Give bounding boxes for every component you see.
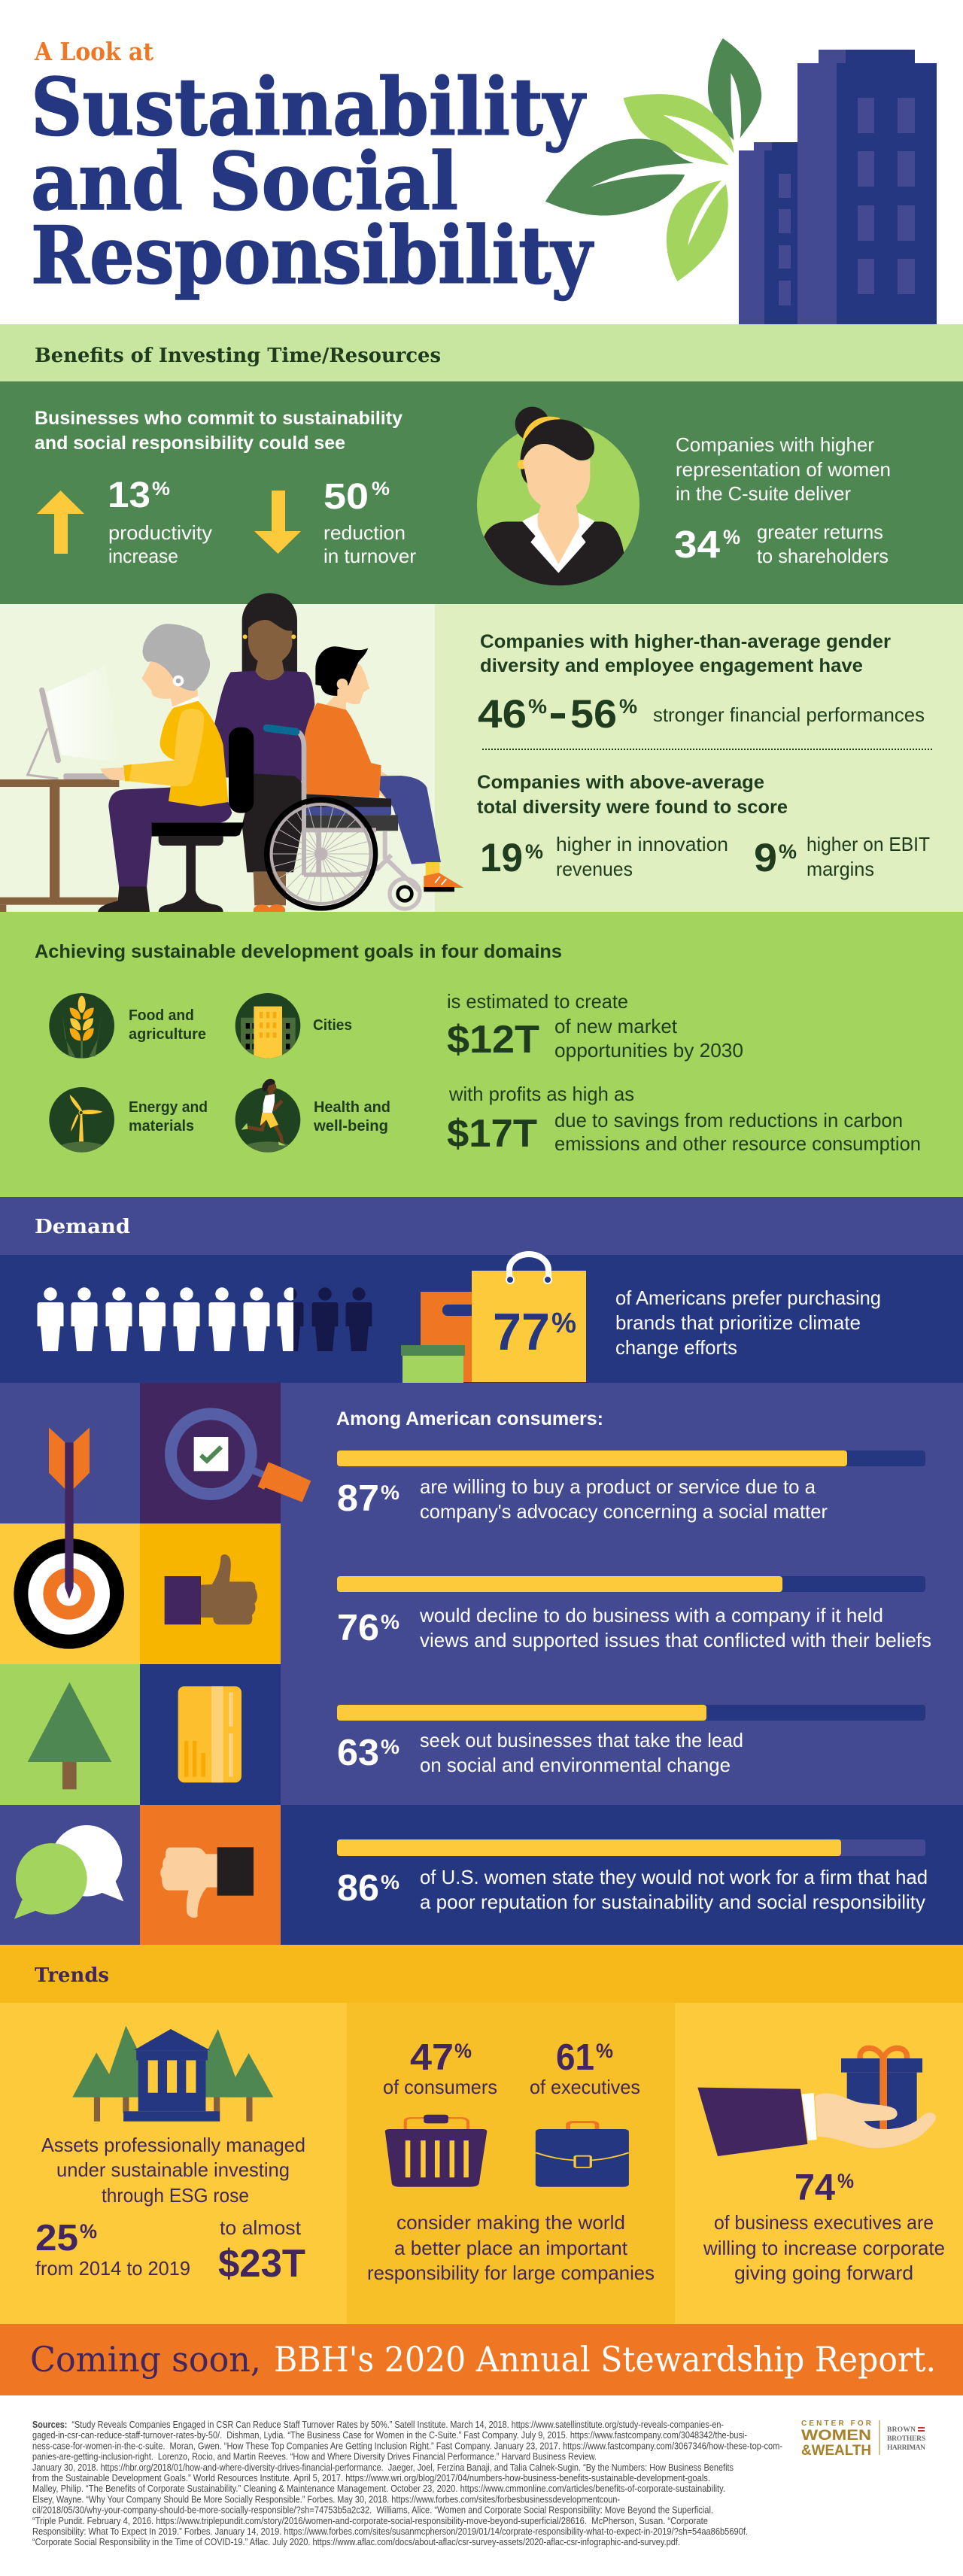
text block: businesses commit (35, 408, 403, 454)
text block: gender diversity: Companies with higher-than-average gender (480, 631, 891, 652)
heading: four domains: Achieving sustainable development goals in four domains (35, 941, 562, 962)
panel: trends heading band (0, 1945, 963, 2003)
stat: 61% executives (530, 2037, 640, 2098)
icon: shopping bags (401, 1254, 586, 1383)
icon: briefcase (536, 2122, 629, 2187)
labels: domains: agriculture (129, 1026, 206, 1043)
panel: header (0, 0, 963, 324)
stat: 46%-56%: 46 (478, 692, 527, 737)
stat: 63%: on social and environmental change (420, 1754, 731, 1776)
panel: 77% band (0, 1254, 963, 1383)
stat: 46%-56%: % (528, 695, 547, 718)
bar chart: 86% (337, 1839, 925, 1856)
title: Sustainability (31, 60, 587, 153)
stat: 77%: % (551, 1308, 576, 1339)
icon: hand holding gift (697, 2048, 936, 2156)
stat: 47% consumers: % (454, 2040, 472, 2062)
sources: “Corporate Social Responsibility in the Time of COVID-19.” Aflac. July 2020. https://www.aflac.com/docs/about-aflac/csr-survey-assets/2020-aflac-csr-infographic-and-survey.pdf. (32, 2536, 680, 2547)
stat: 86% (337, 1866, 928, 1913)
icon: down arrow (254, 491, 301, 554)
stat: 25% (35, 2218, 190, 2280)
panel: trends right (675, 2003, 963, 2324)
stat: 86%: of U.S. women state they would not work for a firm that had (420, 1866, 928, 1888)
stat: 19% innovation (480, 833, 728, 880)
text block: business executives: willing to increase corporate (703, 2237, 945, 2259)
stat: 87%: 87 (337, 1478, 379, 1519)
stat: $12T: $12T (447, 1018, 539, 1062)
text block: Americans prefer: change efforts (615, 1336, 737, 1359)
panel: sustainable development goals (0, 912, 963, 1197)
sources: ness-case-for-women-in-the-c-suite. Moran, Gwen. “How These Top Companies Are Getting Inclusion Right.” Fast Company. January 23, 2017. https://www.fastcompany.com/3067346/how-these-top-com- (32, 2441, 782, 2451)
logo: Brown Brothers Harriman: HARRIMAN (887, 2444, 925, 2452)
panel: benefits heading band (0, 324, 963, 381)
sources: panies-are-getting-inclusion-right. Lorenzo, Rocio, and Martin Reeves. “How and Where Diversity Drives Financial Performance.” Harvard Business Review. (32, 2451, 597, 2462)
stat: 50% reduction: in turnover (324, 545, 416, 567)
icon: wheat (49, 993, 114, 1059)
sources: January 30, 2018. https://hbr.org/2018/01/how-and-where-diversity-drives-financial-performance. Jaeger, Joel, Ferzina Banaji, and Talia Calnek-Sugin. “By the Numbers: How Business Benefits (32, 2462, 734, 2473)
text block: consider making the world: responsibility for large companies (367, 2262, 655, 2284)
stat: 86%: 86 (337, 1868, 379, 1909)
stat: 76%: views and supported issues that conflicted with their beliefs (420, 1629, 931, 1651)
stat: 34% returns: to shareholders (757, 545, 889, 567)
bar chart: 63% (337, 1705, 925, 1721)
icon: pine tree (28, 1682, 111, 1789)
text block: total diversity: Companies with above-average (477, 772, 764, 793)
stat: 61% executives: % (596, 2040, 613, 2062)
stat: 13% productivity: % (152, 478, 170, 500)
icon: computer desk (0, 666, 120, 912)
stat: 50% reduction (324, 477, 416, 567)
icon: thumbs up (165, 1554, 257, 1624)
panel: American consumers (281, 1383, 963, 1945)
stat: 47% consumers: of consumers (383, 2076, 497, 2098)
bar chart: 76% (337, 1576, 925, 1592)
panel: trends middle (347, 2003, 675, 2324)
stat: 50% reduction: 50 (324, 477, 369, 517)
figure: seated older woman (98, 624, 254, 912)
stat: 63% (337, 1729, 743, 1776)
stat: 86%: % (381, 1871, 399, 1894)
stat: 46%-56%: % (619, 695, 637, 718)
icon: city (235, 993, 300, 1060)
stat: $17T: with profits as high as (448, 1083, 634, 1105)
stat: 74%: % (837, 2170, 854, 2192)
sources: Responsibility: What To Expect In 2019.” Forbes. January 14, 2019. https://www.forbes.com/sites/susanmcpherson/2019/01/14/corprate-responsibility-what-to-expect-in-2019/?sh=54aa86b5690f. (32, 2526, 748, 2537)
panel: diversity (0, 593, 963, 912)
icon: credit card (178, 1686, 242, 1782)
stat: $23T: $23T (218, 2242, 305, 2286)
labels: domains: Cities (313, 1017, 352, 1034)
labels: domains (129, 1007, 390, 1135)
stat: 74% (794, 2167, 854, 2208)
stat: $12T: is estimated to create (447, 990, 628, 1013)
stat: 13% productivity (108, 475, 212, 567)
stat: 34% returns: greater returns (757, 521, 883, 543)
sources: Sources: “Study Reveals Companies Engaged in CSR Can Reduce Staff Turnover Rates by 50%.” Satell Institute. March 14, 2018. https://www.satellinstitute.org/study-reveals-companies-en- (32, 2419, 724, 2430)
labels: domains: Health and (314, 1099, 390, 1116)
text block: Americans prefer: brands that prioritize climate (615, 1311, 861, 1334)
stat: 50% reduction: % (372, 478, 390, 500)
stat: 34% returns: 34 (674, 523, 721, 566)
stat: 61% executives: of executives (530, 2076, 640, 2098)
stat: 9% EBIT: % (779, 840, 797, 863)
logo: Center for Women & Wealth: WOMEN (801, 2428, 871, 2444)
stat: 19% innovation: higher in innovation (556, 833, 728, 855)
labels: domains: Food and (129, 1007, 194, 1024)
text block: consider making the world: consider making the world (396, 2211, 625, 2234)
panel: icon grid (0, 1383, 311, 1945)
heading: benefits: Benefits of Investing Time/Resources (35, 345, 441, 367)
text block: business executives (703, 2211, 945, 2284)
panel: coming soon banner (0, 2324, 963, 2395)
icon: city buildings (739, 50, 937, 324)
logo: Brown Brothers Harriman: BROWN (887, 2426, 916, 2434)
stat: 13% productivity: productivity (108, 521, 212, 544)
stat: $17T: $17T (447, 1112, 537, 1156)
panel: green benefits (0, 381, 963, 604)
stat: 34% returns (674, 521, 889, 567)
stat: 9% EBIT: margins (807, 858, 874, 880)
stat: 25%: % (80, 2220, 97, 2243)
text block: consider making the world (367, 2211, 655, 2284)
icon: up arrow (37, 491, 84, 554)
icon: thumbs down (160, 1847, 254, 1918)
stat: 34% returns: % (723, 526, 740, 548)
stat: 76%: would decline to do business with a company if it held (419, 1604, 883, 1627)
stat: 76% (337, 1604, 931, 1651)
labels: domains: materials (129, 1118, 194, 1135)
heading: trends: Trends (35, 1964, 109, 1987)
title (31, 60, 594, 302)
icon: leaves (545, 38, 761, 281)
stat: 9% EBIT: higher on EBIT (807, 833, 930, 855)
sources: cil/2018/05/30/why-your-company-should-be-more-socially-responsible/?sh=74753b5a2c32. Williams, Alice. “Women and Corporate Social Responsibility: Move Beyond the Superficial. (32, 2505, 713, 2516)
text block: C-suite: in the C-suite deliver (676, 482, 851, 505)
icon: bank and trees (72, 2025, 273, 2122)
text block: C-suite: representation of women (676, 458, 891, 481)
logo: Center for Women & Wealth (801, 2420, 872, 2459)
eyebrow: A Look at: A Look at (34, 37, 154, 66)
stat: 46%-56%: stronger financial performances (653, 703, 925, 726)
sources: gaged-in-csr-can-reduce-staff-turnover-rates-by-50/. Dishman, Lydia. “The Business Case for Women in the C-Suite.” Fast Company. July 9, 2015. https://www.fastcompany.com/3048342/the-busi- (32, 2429, 747, 2441)
text block: C-suite (676, 433, 891, 505)
stat: 63%: seek out businesses that take the lead (420, 1729, 743, 1751)
stat: 46%-56%: 56 (570, 692, 617, 737)
stat: 87%: % (381, 1481, 399, 1504)
stat: $23T (218, 2216, 305, 2286)
heading: demand: Demand (35, 1216, 130, 1238)
stat: 13% productivity: increase (108, 545, 178, 567)
text block: assets: under sustainable investing (56, 2158, 290, 2181)
stat: 76%: 76 (337, 1608, 379, 1648)
icon: wind turbine (49, 1087, 114, 1153)
stat: 87%: company's advocacy concerning a social matter (420, 1500, 828, 1523)
text block: C-suite: Companies with higher (676, 433, 874, 456)
stat: $17T: emissions and other resource consumption (554, 1132, 921, 1155)
text block: assets: Assets professionally managed (41, 2134, 305, 2156)
text block: business executives: of business executives are (714, 2211, 934, 2234)
stat: 19% innovation: 19 (480, 836, 523, 880)
bar chart: 87% (337, 1451, 925, 1466)
text block: gender diversity: diversity and employee engagement have (480, 655, 863, 676)
logo: Brown Brothers Harriman: BROTHERS (887, 2435, 925, 2443)
stat: $23T: to almost (220, 2216, 302, 2239)
panel: demand heading band (0, 1197, 963, 1255)
stat: 87% (337, 1475, 828, 1523)
logo: Center for Women & Wealth: &WEALTH (801, 2443, 871, 2459)
labels: domains: Energy and (129, 1099, 208, 1116)
stat: $12T: of new market (554, 1015, 678, 1037)
text block: total diversity: total diversity were found to score (477, 797, 788, 818)
stat: 63%: % (381, 1736, 399, 1758)
figure: man in wheelchair (266, 646, 463, 909)
stat: 87%: are willing to buy a product or service due to a (420, 1475, 816, 1498)
title: and Social (31, 135, 458, 228)
sources: from the Sustainable Development Goals.” World Resources Institute. April 5, 2017. https://www.wri.org/blog/2017/04/numbers-how-business-benefits-sustainable-development-goals. (32, 2472, 710, 2483)
text block: gender diversity (480, 631, 891, 676)
panel: trends left (0, 2003, 347, 2324)
sources (32, 2419, 782, 2547)
text block: Americans prefer (615, 1286, 881, 1359)
text: coming soon: Coming soon, (30, 2339, 261, 2380)
text block: businesses commit: Businesses who commit to sustainability (35, 408, 403, 429)
stat: 13% productivity: 13 (108, 475, 150, 515)
stat: 46%-56% (478, 692, 925, 737)
icon: runner (235, 1079, 301, 1153)
icon: shopping basket (385, 2115, 487, 2187)
stat: 61% executives: 61 (556, 2037, 594, 2078)
text block: assets: through ESG rose (102, 2184, 249, 2207)
text block: consider making the world: a better place an important (394, 2237, 628, 2259)
stat: 9% EBIT: 9 (754, 836, 777, 880)
icon: businesswoman portrait (477, 407, 639, 585)
sources: Elsey, Wayne. “Why Your Company Should Be More Socially Responsible.” Forbes. May 30, 2018. https://www.forbes.com/sites/forbesbusinessdevelopmentcoun- (32, 2493, 620, 2505)
text block: business executives: giving going forward (734, 2262, 913, 2284)
stat: $12T (447, 990, 743, 1062)
stat: $17T (447, 1083, 921, 1156)
stat: 25%: from 2014 to 2019 (35, 2257, 190, 2280)
text block: Americans prefer: of Americans prefer purchasing (615, 1286, 881, 1309)
chart: people pictogram 77 percent (38, 1287, 372, 1351)
icon: magnifying glass check (171, 1414, 311, 1502)
heading: among American consumers: Among American consumers: (336, 1408, 603, 1429)
stat: 47% consumers: 47 (410, 2037, 454, 2078)
stat: 9% EBIT (754, 833, 930, 880)
stat: 19% innovation: revenues (556, 858, 633, 880)
stat: $12T: opportunities by 2030 (554, 1039, 743, 1062)
text block: businesses commit: and social responsibility could see (35, 433, 345, 454)
stat: 63%: 63 (337, 1733, 379, 1773)
sources: Malley, Philip. “The Benefits of Corporate Sustainability.” Cleaning & Maintenance Management. October 23, 2020. https://www.cmmonline.com/articles/benefits-of-corporate-sustainability. (32, 2483, 725, 2494)
stat: $17T: due to savings from reductions in carbon (554, 1109, 903, 1132)
stat: 77%: 77 (493, 1302, 550, 1361)
stat: 86%: a poor reputation for sustainability and social responsibility (420, 1891, 925, 1913)
stat: 25%: 25 (35, 2218, 78, 2259)
stat: 47% consumers (383, 2037, 497, 2098)
text block: assets (41, 2134, 305, 2207)
domain icons (49, 993, 300, 1163)
stat: 74%: 74 (794, 2167, 835, 2208)
title: Responsibility (31, 208, 594, 302)
sources: “Triple Pundit. February 4, 2016. https://www.triplepundit.com/story/2016/women-and-corporate-social-responsibility-move-beyond-superficial/28616. McPherson, Susan. “Corporate (32, 2515, 708, 2526)
logo: Brown Brothers Harriman (887, 2426, 925, 2452)
labels: domains: well-being (313, 1118, 388, 1135)
text block: total diversity (477, 772, 788, 818)
stat: 19% innovation: % (525, 840, 543, 863)
icon: target and arrow (14, 1427, 124, 1649)
logo: Center for Women & Wealth: CENTER FOR (801, 2420, 872, 2428)
illustration: diverse colleagues (0, 593, 463, 912)
figure: standing woman (214, 593, 314, 912)
stat: 50% reduction: reduction (324, 521, 406, 544)
stat: 76%: % (381, 1611, 399, 1633)
icon: speech bubbles (14, 1825, 123, 1919)
